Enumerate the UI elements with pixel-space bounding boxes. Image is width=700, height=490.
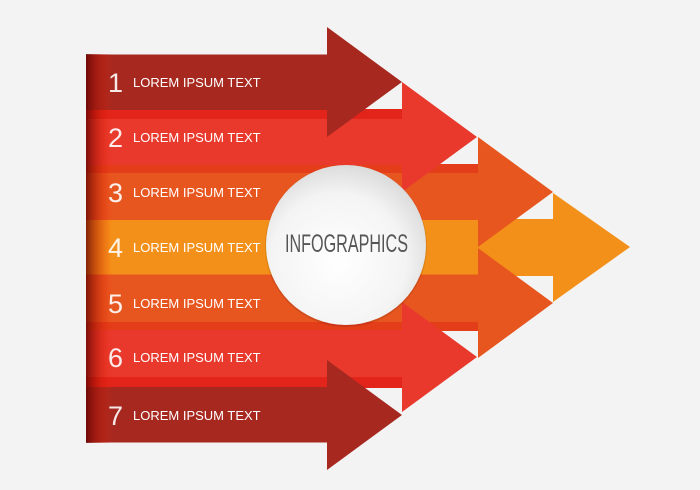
label 7 [108,401,261,431]
arrow 2 [86,82,477,192]
label 4: LOREM IPSUM TEXT [133,240,261,255]
arrow 4 [86,193,630,302]
label 3: 3 [108,178,123,208]
label 4 [108,233,261,263]
label 4: 4 [108,233,123,263]
label 5: 5 [108,289,123,319]
label 1 [108,68,261,98]
arrow 5 [86,248,553,358]
label 2: LOREM IPSUM TEXT [133,130,261,145]
center circle [265,165,427,327]
arrow 1 [86,27,402,137]
arrow 7 [86,360,402,470]
title: INFOGRAPHICS [285,230,408,258]
label 2: 2 [108,123,123,153]
label 6: 6 [108,343,123,373]
label 5: LOREM IPSUM TEXT [133,296,261,311]
label 7: LOREM IPSUM TEXT [133,408,261,423]
label 1: LOREM IPSUM TEXT [133,75,261,90]
label 3: LOREM IPSUM TEXT [133,185,261,200]
arrow 3 [86,137,553,247]
label 6: LOREM IPSUM TEXT [133,350,261,365]
labels [108,68,261,431]
label 1: 1 [108,68,123,98]
label 7: 7 [108,401,123,431]
label 3 [108,178,261,208]
label 6 [108,343,261,373]
label 2 [108,123,261,153]
arrow 6 [86,302,477,412]
label 5 [108,289,261,319]
